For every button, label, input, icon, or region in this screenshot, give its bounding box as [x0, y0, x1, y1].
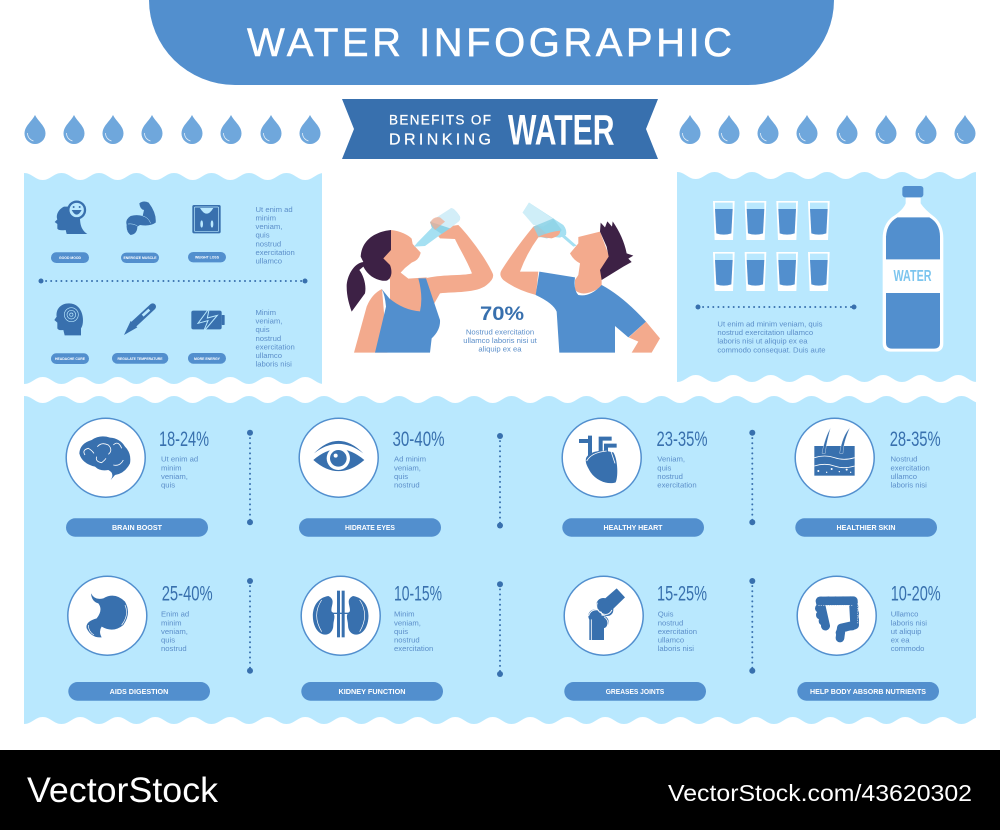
icon: thermometer: [124, 307, 153, 335]
card: healthier skin: laboris nisi: [890, 480, 927, 490]
card: help body absorb nutrients: Ullamco: [891, 610, 918, 619]
card: aids digestion: nostrud: [161, 644, 187, 653]
text block lower: Minim: [256, 308, 276, 317]
text block lower: nostrud: [256, 334, 281, 343]
card: aids digestion: quis: [161, 636, 175, 644]
stat description: ullamco laboris nisi ut: [463, 336, 538, 345]
man: [500, 203, 660, 353]
pill: more energy: [188, 353, 226, 364]
text block upper: veniam,: [256, 222, 282, 231]
card: healthy heart: exercitation: [657, 480, 697, 490]
card: healthy heart: 23-35%: [656, 428, 708, 451]
card: kidney function: quis: [394, 627, 408, 636]
card: aids digestion: 25-40%: [162, 583, 213, 606]
text block lower: exercitation: [256, 342, 295, 351]
card: greases joints: 15-25%: [657, 583, 707, 606]
icon: brain: [79, 436, 130, 480]
pill: regulate temperature: REGULATE TEMPERATURE: [118, 357, 163, 361]
panel: body benefits: [24, 396, 976, 724]
footer logo: VectorStock: [27, 771, 219, 810]
card: help body absorb nutrients: ex ea: [891, 636, 910, 644]
card: healthier skin: Nostrud: [890, 455, 917, 464]
text block upper: exercitation: [256, 248, 295, 257]
card: aids digestion: veniam,: [161, 627, 188, 636]
panel background: [677, 172, 976, 382]
card: healthier skin: 28-35%: [890, 428, 941, 451]
text block upper: nostrud: [256, 239, 281, 248]
pill: good mood: GOOD MOOD: [59, 256, 82, 260]
card: hidrate eyes: [299, 418, 444, 537]
icon: weight scale: [192, 205, 221, 233]
footer url: VectorStock.com/43620302: [668, 780, 972, 806]
pill: regulate temperature: [112, 353, 168, 364]
card: hidrate eyes: 30-40%: [392, 428, 444, 451]
icon: stomach: [86, 593, 128, 637]
card: healthier skin: ullamco: [890, 472, 917, 481]
text block lower: laboris nisi: [256, 360, 292, 369]
icon: skin: [814, 428, 855, 476]
text block upper: quis: [256, 231, 270, 240]
icon: eye: [313, 441, 364, 471]
ribbon text line 1: BENEFITS OF: [389, 112, 491, 127]
woman: [347, 208, 493, 353]
card: aids digestion: minim: [161, 618, 182, 627]
card: kidney function: 10-15%: [394, 583, 442, 606]
glasses grid: [713, 201, 830, 291]
card: healthier skin: exercitation: [890, 463, 930, 472]
card: brain boost: [66, 418, 209, 537]
card: greases joints: ullamco: [658, 636, 684, 644]
pill: energize muscle: ENERGIZE MUSCLE: [124, 256, 157, 260]
card: kidney function: KIDNEY FUNCTION: [338, 687, 406, 696]
ribbon: benefits of drinking water: [342, 99, 658, 159]
text block lower: veniam,: [256, 317, 282, 326]
card: greases joints: Quis: [658, 610, 674, 619]
card: brain boost: quis: [161, 480, 175, 490]
card: kidney function: nostrud: [394, 636, 420, 644]
card: aids digestion: [68, 576, 213, 701]
card: aids digestion: Enim ad: [161, 610, 189, 619]
card: help body absorb nutrients: [797, 576, 941, 701]
stat: 70 percent: 70%: [480, 303, 524, 325]
ribbon text line 2: DRINKING: [389, 131, 491, 148]
stat description: aliquip ex ea: [478, 345, 522, 354]
card: kidney function: veniam,: [394, 618, 421, 627]
card: hidrate eyes: nostrud: [394, 480, 420, 490]
card: kidney function: [301, 576, 443, 701]
icon: happy head: [55, 202, 87, 234]
card: healthy heart: nostrud: [657, 472, 683, 481]
panel background: [24, 396, 976, 724]
panel description: commodo consequat. Duis aute: [717, 345, 826, 354]
bottle label: WATER: [894, 268, 932, 285]
card: healthy heart: HEALTHY HEART: [604, 523, 663, 532]
panel background: [24, 173, 322, 384]
panel: everyday benefits: [24, 173, 322, 384]
panel description: Ut enim ad minim veniam, quis: [717, 320, 823, 328]
text block upper: Ut enim ad: [256, 205, 293, 214]
card: help body absorb nutrients: laboris nisi: [891, 618, 927, 627]
card: greases joints: [564, 576, 707, 701]
icon: joint: [588, 588, 625, 640]
panel description: nostrud exercitation ullamco: [717, 328, 813, 337]
card: greases joints: nostrud: [658, 618, 683, 627]
card: brain boost: 18-24%: [159, 428, 209, 451]
card: brain boost: veniam,: [161, 472, 188, 481]
stat description: Nostrud exercitation: [466, 327, 534, 336]
pill: good mood: [51, 252, 89, 263]
pill: weight loss: WEIGHT LOSS: [195, 256, 220, 260]
footer bar: [0, 750, 1000, 830]
card: hidrate eyes: veniam,: [394, 463, 421, 472]
card: hidrate eyes: HIDRATE EYES: [345, 523, 395, 532]
card: brain boost: minim: [161, 463, 182, 472]
icon group: [54, 201, 225, 335]
card: healthier skin: HEALTHIER SKIN: [836, 523, 896, 532]
pill: headache cure: [51, 353, 89, 364]
water bottle: [883, 186, 943, 352]
card: brain boost: BRAIN BOOST: [112, 523, 162, 532]
card: help body absorb nutrients: ut aliquip: [891, 627, 921, 636]
header shape: [149, 0, 834, 85]
card: kidney function: exercitation: [394, 644, 433, 653]
ribbon shape: [342, 99, 658, 159]
pill: energize muscle: [121, 253, 159, 263]
header banner: [149, 0, 834, 85]
card: healthy heart: quis: [657, 463, 672, 472]
text block lower: ullamco: [256, 351, 282, 360]
illustration: people drinking water: [347, 203, 660, 353]
pill: headache cure: HEADACHE CURE: [55, 357, 86, 361]
pill: more energy: MORE ENERGY: [194, 357, 221, 361]
card: greases joints: laboris nisi: [658, 644, 694, 653]
card: aids digestion: AIDS DIGESTION: [110, 687, 168, 696]
icon: heart: [579, 436, 617, 483]
card: greases joints: GREASES JOINTS: [606, 687, 664, 696]
pill: weight loss: [188, 252, 226, 262]
card: help body absorb nutrients: commodo: [891, 644, 924, 653]
icon: kidneys: [313, 591, 368, 637]
right water drops row: [680, 115, 976, 144]
icon: battery energy: [191, 308, 225, 332]
card: healthier skin: [795, 418, 941, 537]
panel: daily water glasses and bottle: [677, 172, 976, 382]
card: help body absorb nutrients: 10-20%: [891, 583, 941, 606]
text block upper: minim: [256, 214, 276, 223]
card: greases joints: exercitation: [658, 627, 697, 636]
icon: headache head: [54, 303, 83, 335]
card: brain boost: Ut enim ad: [161, 455, 198, 464]
ribbon word water: WATER: [508, 106, 614, 154]
left water drops row: [24, 115, 320, 144]
text block upper: ullamco: [256, 256, 282, 266]
icon: intestine: [815, 596, 859, 642]
card: help body absorb nutrients: HELP BODY ABSORB NUTRIENTS: [810, 687, 926, 696]
card: healthy heart: Veniam,: [657, 455, 685, 464]
card: healthy heart: [562, 418, 708, 537]
title: WATER INFOGRAPHIC: [247, 21, 732, 65]
text block lower: quis: [256, 325, 270, 334]
icon: flexed muscle: [126, 201, 156, 235]
panel description: laboris nisi ut aliquip ex ea: [717, 337, 808, 346]
card: hidrate eyes: Ad minim: [394, 455, 426, 464]
card: hidrate eyes: quis: [394, 472, 408, 481]
card: kidney function: Minim: [394, 610, 414, 619]
